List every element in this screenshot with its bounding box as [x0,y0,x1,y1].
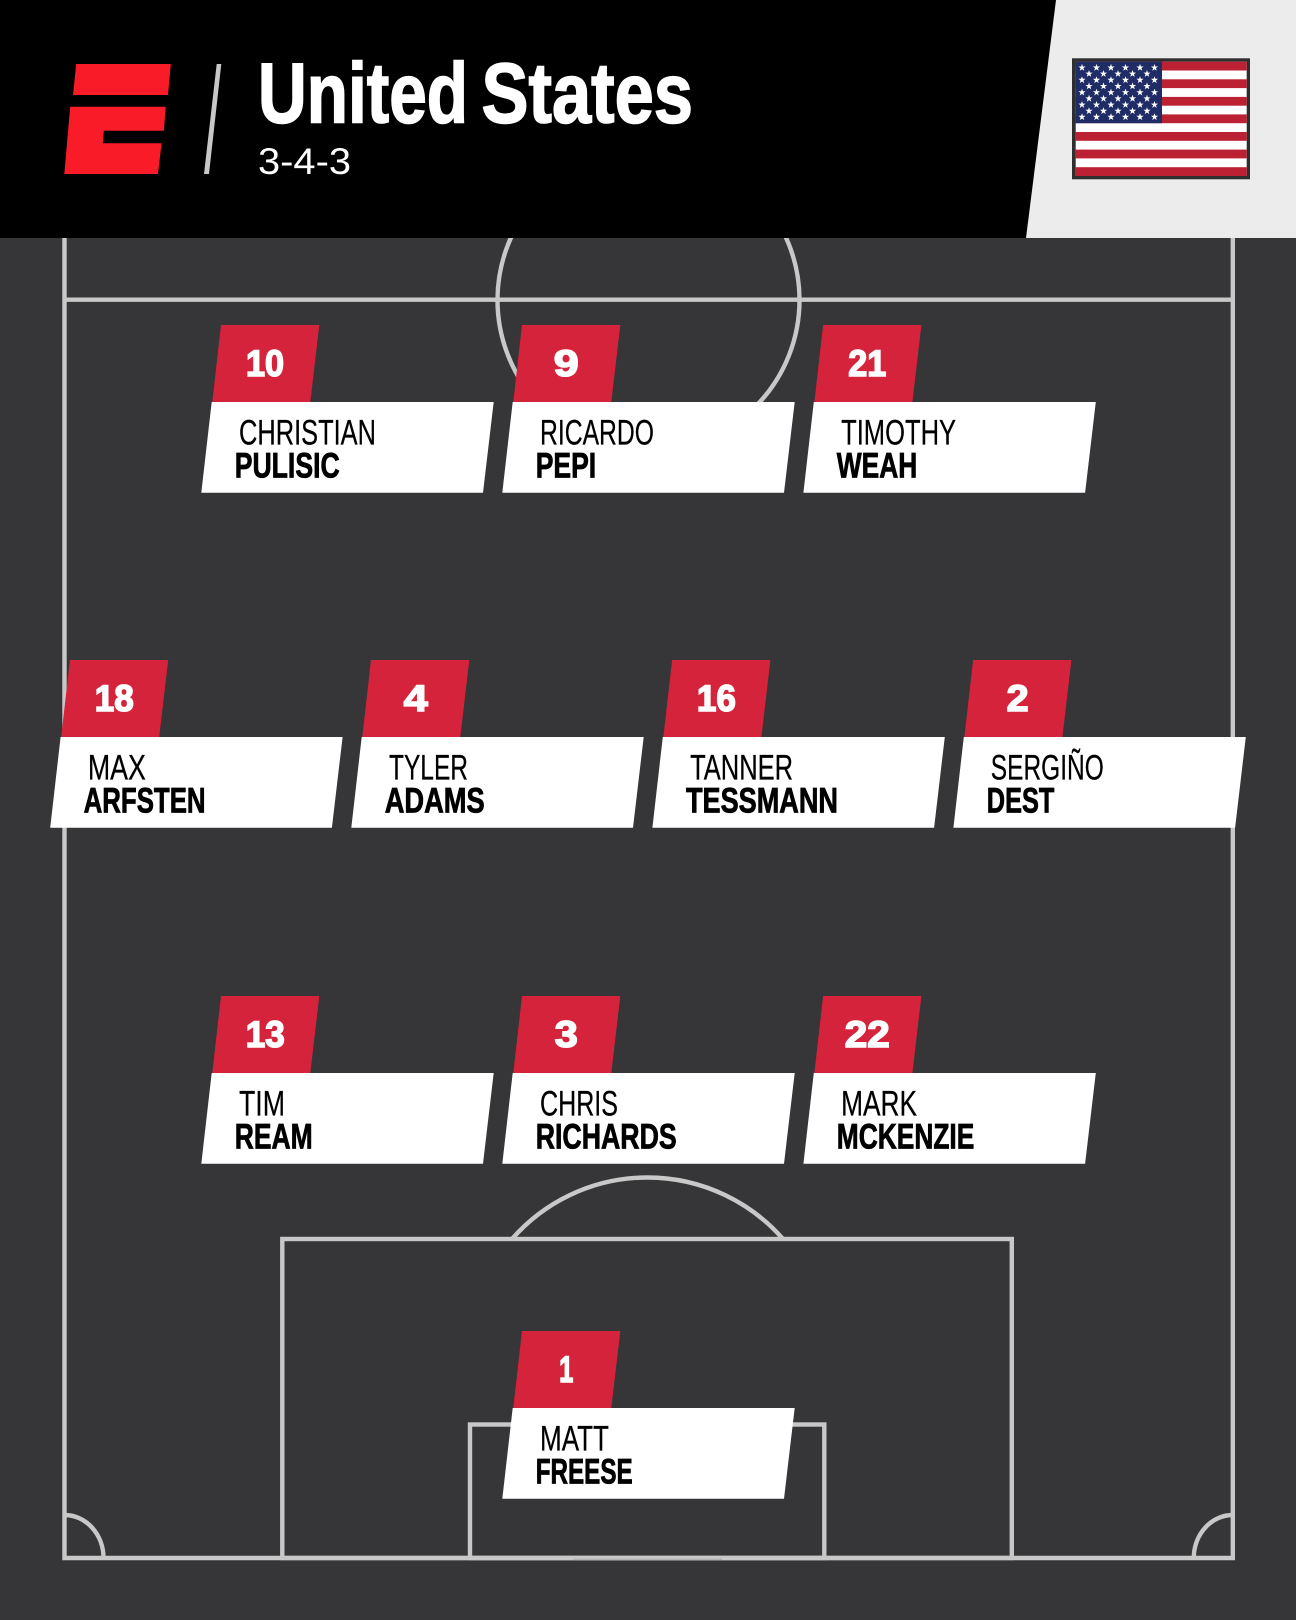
ESPN logo [64,64,171,174]
left corner arc [64,1515,104,1558]
player card: 13 Tim Ream: TIM [239,1083,285,1123]
player card: 3 Chris Richards [502,996,795,1164]
player card: 21 Timothy Weah [803,325,1096,493]
title [258,46,693,142]
penalty arc [512,1177,783,1239]
pitch markings [64,149,1233,1560]
player card: 2 Sergiño Dest: DEST [987,781,1055,821]
player card: 22 Mark McKenzie: MARK [841,1083,917,1123]
player card: 13 Tim Ream: 13 [246,1014,285,1055]
player card: 1 Matt Freese [502,1331,795,1499]
player card: 9 Ricardo Pepi: 9 [554,343,579,384]
player card: 10 Christian Pulisic [201,325,494,493]
player card: 16 Tanner Tessmann: 16 [697,678,736,719]
player card: 9 Ricardo Pepi [502,325,795,493]
penalty box [282,1239,1012,1558]
goal line marker [573,1558,722,1560]
player card: 3 Chris Richards: RICHARDS [536,1117,677,1157]
player card: 1 Matt Freese: MATT [540,1418,609,1458]
title: States [482,46,693,142]
centre circle [498,149,800,451]
player card: 18 Max Arfsten: MAX [88,747,146,787]
divider slash [204,64,221,174]
player card: 9 Ricardo Pepi: PEPI [536,446,596,486]
icon: US flag [1072,58,1250,179]
formation: 3-4-3 [258,141,351,182]
player card: 4 Tyler Adams: ADAMS [385,781,485,821]
player card: 21 Timothy Weah: TIMOTHY [841,412,956,452]
header band [0,0,1296,238]
player card: 22 Mark McKenzie: 22 [845,1014,890,1055]
player card: 2 Sergiño Dest: SERGIÑO [991,747,1104,787]
player card: 4 Tyler Adams [351,660,644,828]
player card: 3 Chris Richards: 3 [555,1014,578,1055]
player card: 13 Tim Ream [201,996,494,1164]
right corner arc [1194,1515,1233,1558]
player card: 10 Christian Pulisic: 10 [246,343,284,384]
player card: 13 Tim Ream: REAM [235,1117,313,1157]
player card: 16 Tanner Tessmann [652,660,945,828]
title: United [258,46,468,142]
player card: 10 Christian Pulisic: PULISIC [235,446,340,486]
player card: 22 Mark McKenzie: MCKENZIE [837,1117,974,1157]
player card: 18 Max Arfsten: ARFSTEN [84,781,206,821]
player card: 10 Christian Pulisic: CHRISTIAN [239,412,376,452]
player card: 4 Tyler Adams: TYLER [389,747,468,787]
pitch outline [64,238,1233,1558]
player card: 9 Ricardo Pepi: RICARDO [540,412,654,452]
player card: 2 Sergiño Dest: 2 [1007,678,1029,719]
player card: 21 Timothy Weah: WEAH [837,446,917,486]
player card: 3 Chris Richards: CHRIS [540,1083,618,1123]
player card: 2 Sergiño Dest [953,660,1246,828]
goal area [470,1424,824,1558]
halfway line [64,298,1233,302]
player card: 16 Tanner Tessmann: TESSMANN [686,781,838,821]
player card: 16 Tanner Tessmann: TANNER [690,747,793,787]
player card: 21 Timothy Weah: 21 [848,343,886,384]
player card: 1 Matt Freese: 1 [559,1349,573,1390]
player card: 18 Max Arfsten: 18 [95,678,134,719]
player card: 18 Max Arfsten [50,660,343,828]
player card: 22 Mark McKenzie [803,996,1096,1164]
player card: 4 Tyler Adams: 4 [404,678,428,719]
flag panel [1026,0,1296,238]
player card: 1 Matt Freese: FREESE [536,1452,633,1492]
